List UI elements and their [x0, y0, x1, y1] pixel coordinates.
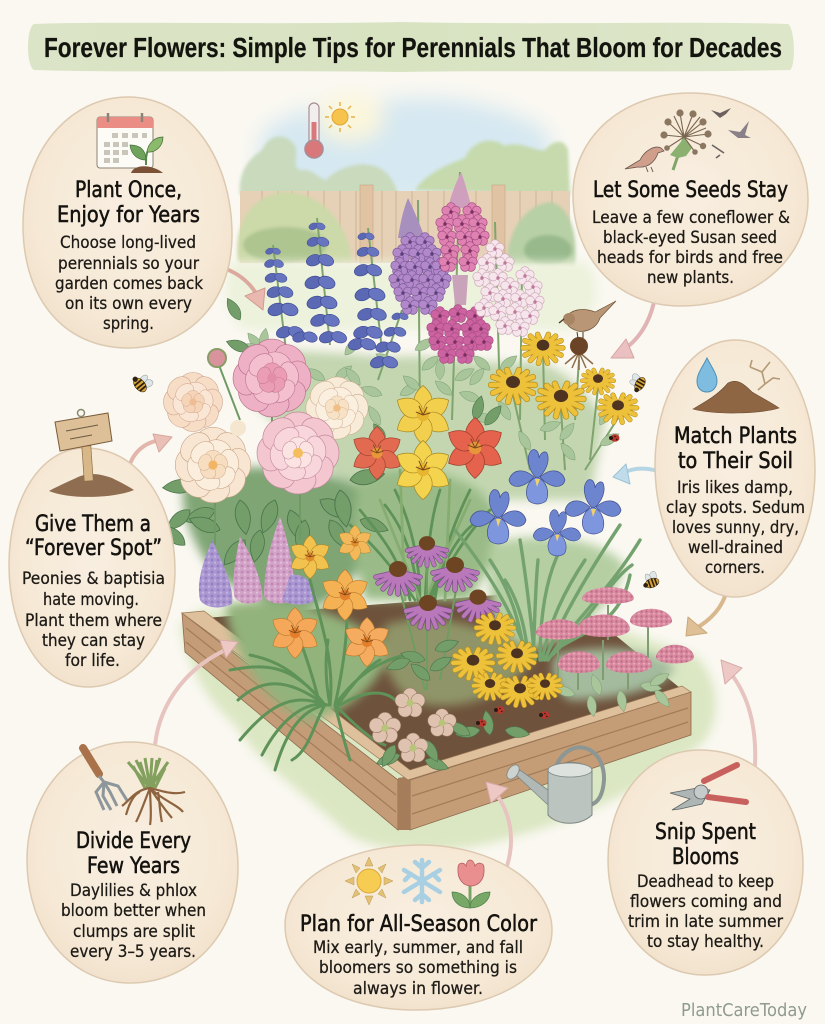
- bird on seed head: [559, 301, 616, 338]
- watering can: [504, 747, 604, 823]
- daylily foliage clump: [230, 580, 405, 770]
- icon: snowflake: [404, 860, 440, 902]
- corner post: [398, 776, 410, 830]
- arrow: plan to bed: [486, 782, 511, 872]
- body text: [628, 872, 783, 952]
- icon: sun: [345, 857, 393, 905]
- irises: [455, 450, 640, 660]
- background trees left: [240, 136, 400, 195]
- lupine spikes: [263, 222, 409, 370]
- body text: always in flower.: [353, 979, 483, 999]
- purple delphinium: [389, 198, 451, 314]
- body text: Iris likes damp,: [677, 478, 793, 498]
- body text: heads for birds and free: [597, 248, 783, 268]
- heading: Let Some Seeds Stay: [593, 178, 788, 203]
- white phlox spike: [473, 240, 544, 336]
- body text: hate moving.: [43, 590, 139, 610]
- daylilies: orange: [269, 525, 392, 667]
- body text: clay spots. Sedum: [666, 498, 805, 518]
- icon: wooden sign in soil: [49, 410, 134, 497]
- arrow: soil to iris: [613, 464, 664, 484]
- panel: all-season color: [285, 845, 552, 1010]
- panel: seeds: [573, 93, 808, 306]
- garden background scene: [180, 94, 716, 851]
- watermark: PlantCareToday: [681, 1001, 807, 1021]
- grass patch around bed: [180, 610, 716, 851]
- heading: [25, 512, 162, 561]
- shrub left: [237, 192, 352, 263]
- body text: well-drained: [688, 538, 783, 558]
- body text: [313, 938, 523, 999]
- body text: to stay healthy.: [647, 932, 764, 952]
- body text: [592, 208, 790, 288]
- heading: [674, 424, 797, 474]
- body text: Plant them where: [25, 611, 162, 631]
- arrow: forever spot to peonies: [129, 434, 172, 467]
- heading: [76, 829, 191, 879]
- rim: [182, 611, 691, 780]
- heading: Give Them a: [35, 512, 151, 537]
- body text: [55, 233, 203, 334]
- heading: [655, 820, 756, 870]
- heading: Enjoy for Years: [57, 203, 200, 228]
- panel: plant once: [23, 97, 232, 348]
- heading: Few Years: [87, 854, 180, 879]
- arrow: plant once to lupines: [217, 266, 265, 310]
- icon: garden fork and divided clump: [83, 748, 185, 825]
- body text: perennials so your: [58, 254, 199, 274]
- body text: Deadhead to keep: [637, 872, 774, 892]
- soil: [205, 590, 680, 772]
- panel: snip: [608, 750, 803, 975]
- body text: Daylilies & phlox: [70, 881, 197, 901]
- body text: garden comes back: [55, 274, 203, 294]
- heading: to Their Soil: [678, 449, 793, 474]
- peonies: [158, 296, 390, 569]
- icon: calendar with sprout: [97, 113, 163, 173]
- title banner: [28, 22, 794, 72]
- wooden fence: [240, 185, 570, 263]
- body text: clumps are split: [73, 922, 195, 942]
- body text: for life.: [65, 651, 120, 671]
- faint leaf mass behind spikes: [250, 345, 605, 500]
- icon: tulip: [452, 860, 490, 908]
- body text: bloom better when: [61, 901, 206, 921]
- left side board: [182, 613, 398, 830]
- body text: loves sunny, dry,: [672, 518, 799, 538]
- body text: black-eyed Susan seed: [603, 228, 777, 248]
- purple spikes lower-left: [199, 517, 317, 607]
- body text: they can stay: [42, 631, 145, 651]
- heading: Blooms: [672, 845, 739, 870]
- peony foliage leaves: [158, 296, 390, 569]
- panel: forever spot: [9, 410, 175, 687]
- body text: every 3–5 years.: [70, 942, 196, 962]
- sedum clusters: [536, 587, 694, 717]
- icon: seed head and birds: [625, 108, 751, 172]
- pink phlox spike: [427, 172, 493, 363]
- background trees right: [415, 141, 570, 195]
- body text: [22, 569, 165, 671]
- flower stems: [273, 172, 618, 470]
- body text: trim in late summer: [628, 912, 783, 932]
- spent seed head: [565, 337, 593, 370]
- small rudbeckia cluster: [446, 434, 620, 740]
- lawn: [226, 262, 596, 330]
- body text: Choose long-lived: [60, 233, 196, 253]
- icon: water drop, soil, cracks: [693, 358, 780, 413]
- right side board: [410, 692, 691, 830]
- iris leaves: [455, 525, 640, 660]
- arrow: snip to sedum: [721, 660, 755, 765]
- foliage mass: [183, 467, 675, 722]
- body text: [61, 881, 206, 962]
- coneflowers: [376, 536, 499, 690]
- heading: Plant Once,: [75, 178, 182, 203]
- body text: flowers coming and: [630, 892, 782, 912]
- lily foliage blades: [350, 470, 490, 600]
- body text: spring.: [103, 314, 154, 334]
- panel: soil: [655, 340, 815, 597]
- arrow: soil to sedum: [686, 590, 727, 636]
- body text: corners.: [705, 558, 765, 578]
- body text: new plants.: [647, 268, 734, 288]
- lilies: yellow and red: [350, 385, 506, 500]
- body text: [666, 478, 805, 578]
- body text: Leave a few coneflower &: [592, 208, 790, 228]
- bees: [130, 369, 662, 590]
- arrow: divide to daylilies: [155, 640, 238, 745]
- icon: pruners: [670, 765, 746, 810]
- heading: “Forever Spot”: [25, 536, 162, 561]
- raised wooden bed: [182, 590, 691, 830]
- arrow: seeds to rudbeckia: [611, 297, 655, 358]
- heading: Divide Every: [76, 829, 191, 854]
- shrub right: [507, 202, 576, 265]
- body text: on its own every: [65, 294, 192, 314]
- sun icon: [325, 102, 355, 132]
- heading: Snip Spent: [655, 820, 756, 845]
- heading: Match Plants: [674, 424, 797, 449]
- body text: Peonies & baptisia: [22, 569, 165, 589]
- hellebores: [369, 688, 456, 773]
- spike leaves: [240, 328, 621, 463]
- body text: Mix early, summer, and fall: [313, 938, 523, 958]
- body text: bloomers so something is: [319, 958, 517, 978]
- heading: Plan for All-Season Color: [300, 912, 538, 937]
- sky wash: [258, 94, 552, 200]
- panel: divide: [27, 742, 238, 983]
- rudbeckia cluster upper: [491, 334, 637, 422]
- thermometer icon: [305, 103, 323, 158]
- heading: [57, 178, 200, 228]
